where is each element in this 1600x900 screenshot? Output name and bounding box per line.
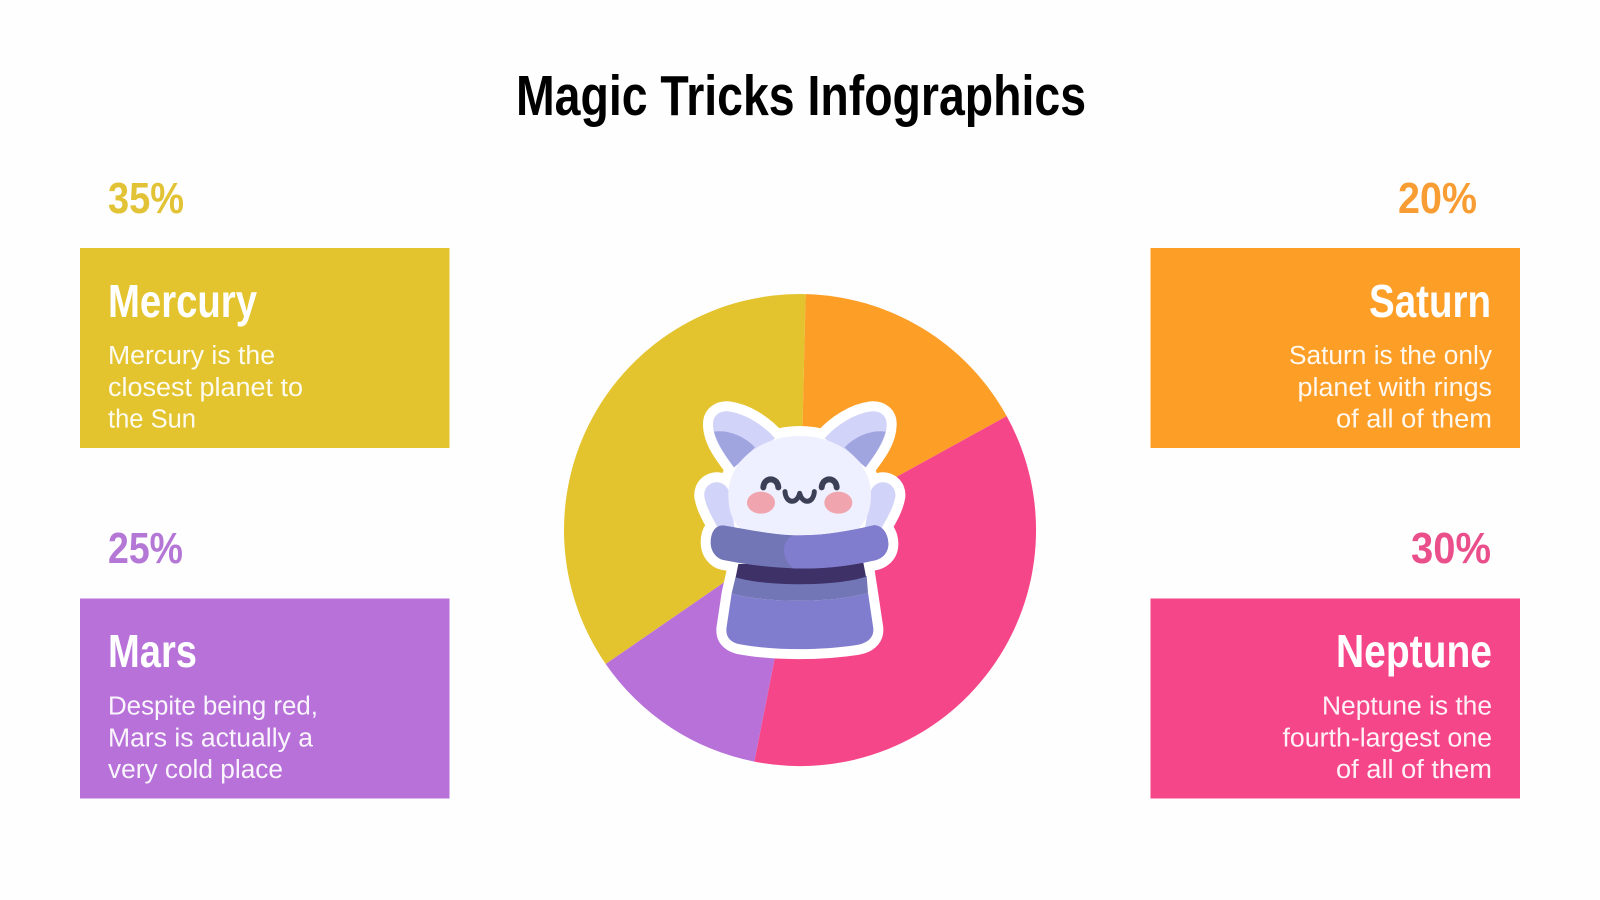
text: Neptune description: fourth-largest one (1282, 724, 1492, 752)
text: Neptune description (1282, 692, 1492, 784)
icon: face (747, 479, 852, 514)
icon outline: white sticker border (704, 411, 895, 649)
text: Saturn description: planet with rings (1298, 374, 1492, 402)
panel: Saturn (1150, 248, 1520, 448)
text: Mars description: Despite being red, (108, 692, 318, 720)
text: Mars description: very cold place (108, 756, 283, 784)
text: Saturn description: of all of them (1336, 406, 1492, 434)
icon: right ear (825, 411, 887, 467)
pie chart (564, 294, 1036, 766)
text: Mercury description (108, 342, 303, 434)
slice: Saturn orange (800, 294, 1007, 530)
text: Mercury description: Mercury is the (108, 342, 275, 370)
text: Neptune description: of all of them (1336, 756, 1492, 784)
icon: bunny in magic hat (704, 411, 895, 649)
heading: Saturn: Saturn (1369, 275, 1491, 327)
percentage: Saturn 20%: 20% (1398, 174, 1477, 223)
icon: hat body (726, 593, 873, 649)
text: Saturn description (1289, 342, 1492, 434)
icon: left ear (713, 411, 775, 467)
text: Mars description: Mars is actually a (108, 724, 314, 752)
icon: hat lower band (732, 576, 868, 601)
text: Mars description (108, 692, 318, 784)
icon: right arm (865, 482, 895, 530)
text: Saturn description: Saturn is the only (1289, 342, 1492, 370)
heading: Neptune: Neptune (1336, 625, 1492, 677)
heading: Mercury: Mercury (108, 275, 257, 327)
text: Mercury description: closest planet to (108, 374, 303, 402)
title: Magic Tricks Infographics (516, 64, 1086, 128)
icon: hat dark band (736, 563, 866, 584)
panel: Mercury (80, 248, 450, 448)
text: Mercury description: the Sun (108, 406, 196, 434)
panel: Mars (80, 598, 450, 798)
heading: Mars: Mars (108, 625, 197, 677)
percentage: Mercury 35%: 35% (108, 174, 184, 223)
text: Neptune description: Neptune is the (1322, 692, 1492, 720)
icon: head (728, 436, 871, 535)
slice: Neptune pink (754, 416, 1036, 766)
percentage: Mars 25%: 25% (108, 524, 183, 573)
icon: hat brim (711, 525, 888, 569)
slice: Mercury yellow (564, 294, 806, 664)
icon: left arm (704, 482, 735, 530)
percentage: Neptune 30%: 30% (1411, 524, 1491, 573)
slice: Mars purple (606, 530, 800, 762)
panel: Neptune (1150, 598, 1520, 798)
